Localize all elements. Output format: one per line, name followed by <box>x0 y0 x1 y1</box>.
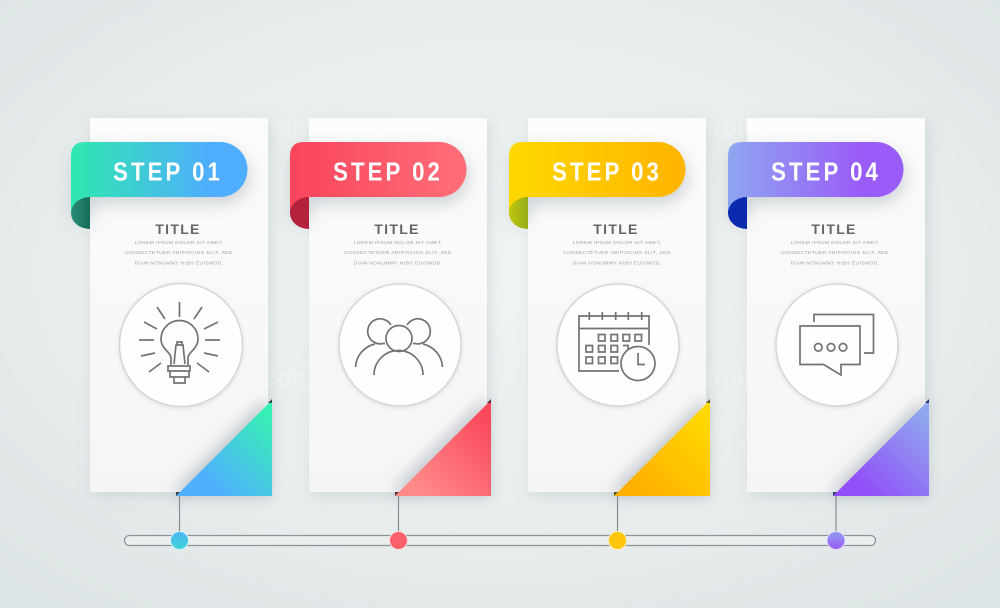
title 1: TITLE <box>155 221 201 237</box>
fold triangle 4 <box>833 399 929 496</box>
body text 2: DIAM NONUMMY NIBH EUISMOD. <box>354 260 442 266</box>
card 1 body <box>90 118 268 492</box>
timeline bar <box>124 536 876 546</box>
connector 2 <box>398 496 400 534</box>
icon circle 4 <box>776 284 898 406</box>
body text 4: LOREM IPSUM DOLOR SIT AMET, <box>791 240 879 246</box>
ribbon 4 tail <box>728 197 747 229</box>
watermark <box>187 114 813 392</box>
fold triangle 2 <box>395 399 491 496</box>
card 3 body <box>528 118 706 492</box>
step 02 label: STEP 02 <box>333 158 443 187</box>
body text 3: DIAM NONUMMY NIBH EUISMOD. <box>573 260 661 266</box>
ribbon 2 <box>290 142 466 214</box>
icon circle 1 <box>120 284 242 406</box>
icon: people <box>356 319 442 375</box>
icon: calendar with clock <box>579 312 655 380</box>
watermark: Tarpik.com <box>687 365 813 392</box>
ribbon 3 <box>509 142 686 214</box>
watermark: Tarpik.com <box>187 114 313 141</box>
connector 4 <box>835 496 837 534</box>
connector 1 <box>178 496 180 534</box>
ribbon 3 tail <box>509 197 528 229</box>
body text 3: CONSECTETUER ADIPISCING ELIT, SED <box>563 250 671 256</box>
card 4 body <box>747 118 925 492</box>
body text 1: DIAM NONUMMY NIBH EUISMOD. <box>135 260 223 266</box>
watermark: Tarpik.com <box>187 365 313 392</box>
body text 4: DIAM NONUMMY NIBH EUISMOD. <box>791 260 879 266</box>
ribbon 4 <box>728 142 904 214</box>
panel: step 03 <box>509 118 710 550</box>
connector 3 <box>616 496 618 534</box>
body text 1: LOREM IPSUM DOLOR SIT AMET, <box>135 240 223 246</box>
timeline dot 3 <box>608 532 626 550</box>
ribbon 2 tail <box>290 197 309 229</box>
body text 2: CONSECTETUER ADIPISCING ELIT, SED <box>344 250 452 256</box>
fold triangle 3 <box>614 399 710 496</box>
title 3: TITLE <box>593 221 639 237</box>
timeline dot 4 <box>827 532 845 550</box>
step 04 label: STEP 04 <box>771 158 881 187</box>
card 2 body <box>309 118 487 492</box>
timeline dot 1 <box>170 532 188 550</box>
panel: step 01 <box>71 118 272 550</box>
panel: step 02 <box>290 118 491 550</box>
fold triangle 1 <box>176 399 272 496</box>
title 2: TITLE <box>374 221 420 237</box>
icon: chat bubbles <box>800 314 874 375</box>
body text 1: CONSECTETUER ADIPISCING ELIT, SED <box>125 250 233 256</box>
panel: step 04 <box>728 118 929 550</box>
body text 2: LOREM IPSUM DOLOR SIT AMET, <box>354 240 442 246</box>
icon: light bulb <box>139 302 220 383</box>
watermark: Tarpik.com <box>687 114 813 141</box>
body text 3: LOREM IPSUM DOLOR SIT AMET, <box>573 240 661 246</box>
ribbon 1 tail <box>71 197 90 229</box>
icon circle 2 <box>339 284 461 406</box>
ribbon 1 <box>71 142 248 214</box>
timeline dot 2 <box>390 532 408 550</box>
icon circle 3 <box>557 284 679 406</box>
step 03 label: STEP 03 <box>552 158 662 187</box>
body text 4: CONSECTETUER ADIPISCING ELIT, SED <box>781 250 889 256</box>
title 4: TITLE <box>811 221 857 237</box>
step 01 label: STEP 01 <box>113 158 223 187</box>
